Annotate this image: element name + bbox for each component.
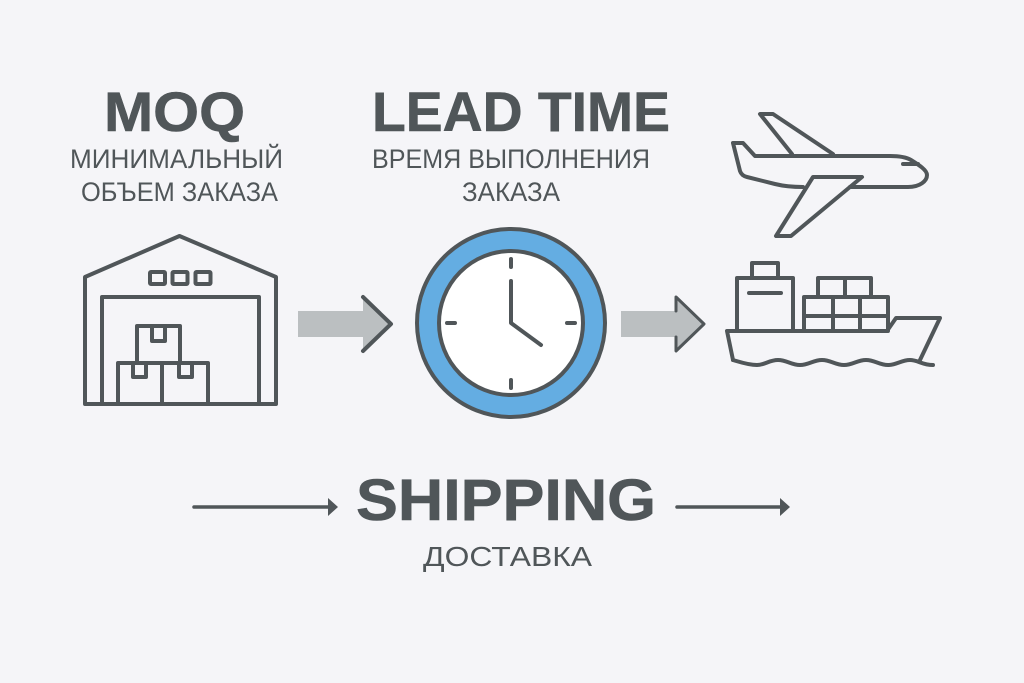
heading: LEAD TIME: LEAD TIME: [372, 80, 670, 143]
icon: clock: [417, 229, 605, 417]
text: LEAD TIME subtitle: [372, 144, 650, 207]
icon: cargo ship: [727, 263, 940, 365]
arrow: clock to transport: [621, 297, 704, 351]
arrow: warehouse to clock: [298, 297, 391, 351]
text: MOQ subtitle: [70, 143, 283, 207]
icon: warehouse: [85, 236, 276, 404]
text: SHIPPING subtitle: ДОСТАВКА: [423, 541, 592, 572]
text: LEAD TIME subtitle: ВРЕМЯ ВЫПОЛНЕНИЯ: [372, 144, 650, 174]
heading: SHIPPING: SHIPPING: [356, 468, 656, 533]
text: LEAD TIME subtitle: ЗАКАЗА: [462, 177, 560, 207]
heading: MOQ: MOQ: [104, 80, 245, 143]
arrow: shipping right: [677, 498, 790, 516]
text: MOQ subtitle: ОБЪЕМ ЗАКАЗА: [81, 177, 278, 207]
text: MOQ subtitle: МИНИМАЛЬНЫЙ: [70, 143, 283, 174]
icon: airplane: [733, 114, 927, 236]
arrow: shipping left: [194, 498, 338, 516]
